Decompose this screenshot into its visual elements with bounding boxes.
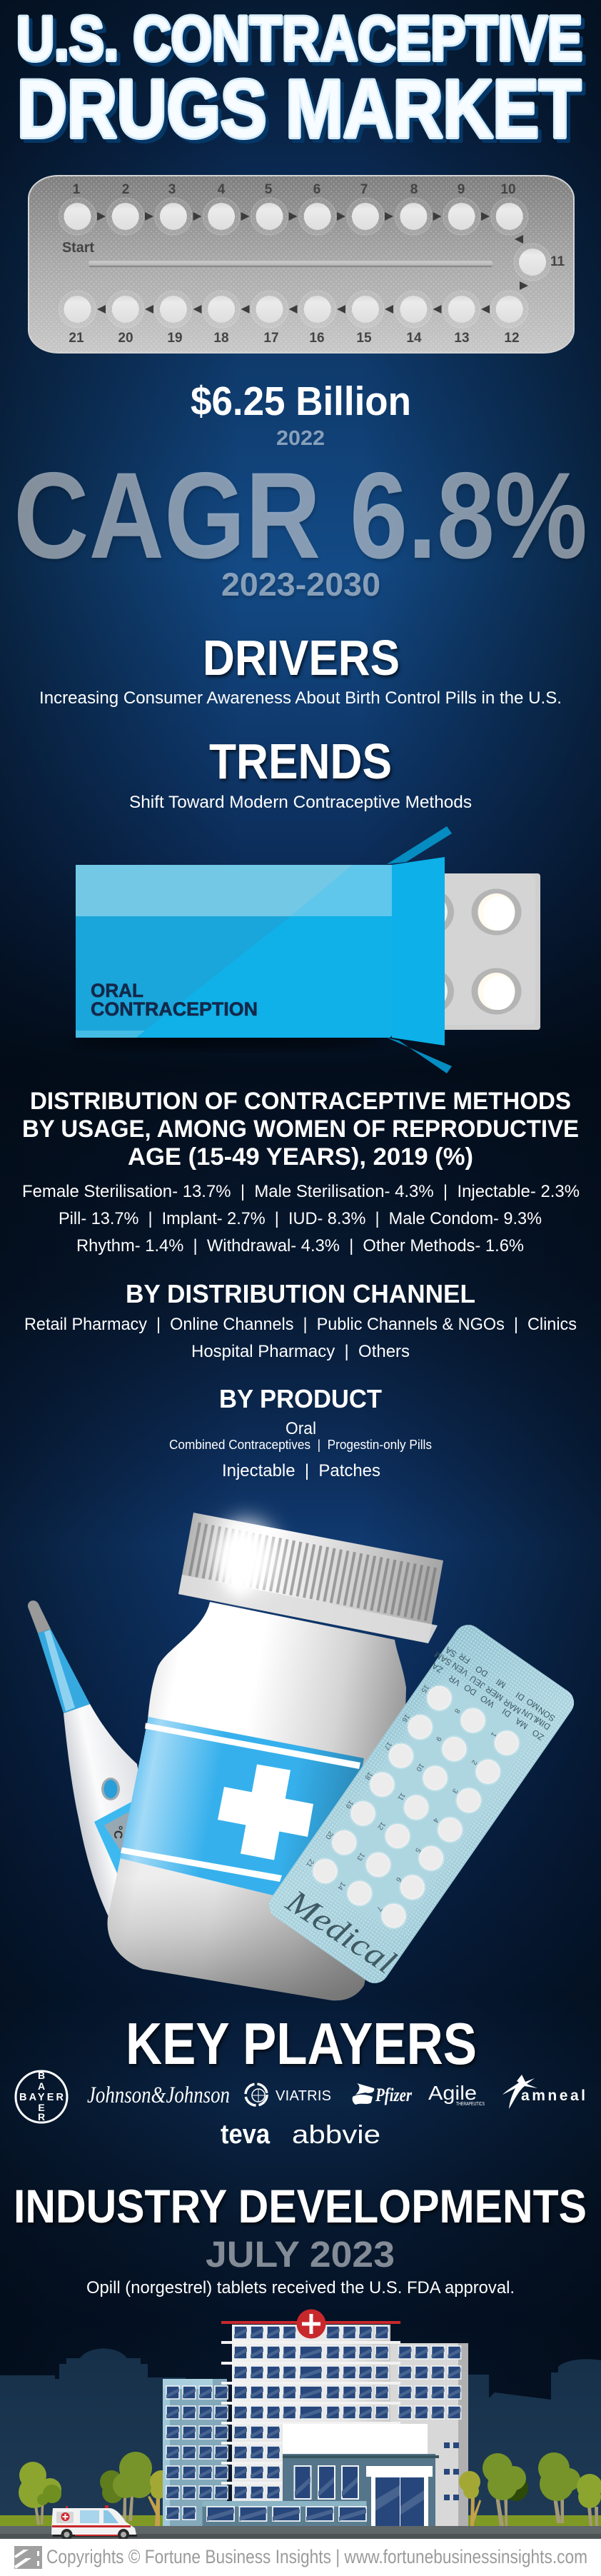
logo: AbbVie: abbvie (292, 2120, 380, 2149)
logo: Johnson & Johnson: Johnson&Johnson (87, 2083, 230, 2108)
box front (76, 865, 392, 1038)
illustration: thermometer (28, 1600, 153, 1921)
blister sheet (403, 873, 540, 1030)
product list (169, 1419, 432, 1480)
day numbers: 9 (458, 182, 465, 197)
logo: Bayer (16, 2070, 67, 2123)
illustration: 21-day pill pack (29, 176, 574, 353)
day numbers: 4 (218, 182, 226, 197)
day numbers: 14 (406, 331, 422, 346)
development date: JULY 2023 (206, 2234, 395, 2275)
blister day numbers: 9 (434, 1735, 443, 1743)
blister pills (313, 1686, 519, 1928)
distribution figures: Rhythm- 1.4% | Withdrawal- 4.3% | Other Methods- 1.6% (76, 1236, 524, 1256)
blister weekday labels: DI (514, 1690, 527, 1703)
blister weekday labels: DI (500, 1706, 513, 1719)
product list: Injectable | Patches (222, 1461, 380, 1480)
left wing windows (166, 2386, 228, 2520)
illustration: hospital (163, 2310, 468, 2526)
drivers heading: DRIVERS (203, 630, 400, 686)
bottom row pills (59, 291, 528, 328)
distribution figures (22, 1182, 580, 1256)
distribution channel list (24, 1315, 577, 1361)
illustration: ambulance (51, 2505, 137, 2540)
day numbers: 6 (313, 182, 320, 197)
distribution heading: BY USAGE, AMONG WOMEN OF REPRODUCTIVE (22, 1116, 579, 1143)
hospital red cross sign (221, 2310, 400, 2338)
blister weekday labels: DO (473, 1663, 490, 1679)
logo: Agile Therapeutics: THERAPEUTICS (456, 2102, 485, 2107)
blister day numbers: 17 (382, 1740, 393, 1752)
label cross (218, 1764, 313, 1860)
day numbers: 3 (168, 182, 176, 197)
distribution heading (22, 1088, 579, 1171)
blister day numbers: 11 (395, 1791, 407, 1802)
distribution heading: AGE (15-49 YEARS), 2019 (%) (128, 1143, 473, 1171)
entrance block (283, 2454, 439, 2526)
logo: Bayer: R (38, 2111, 45, 2123)
product heading: BY PRODUCT (219, 1384, 382, 1413)
pack tear bar (89, 261, 493, 267)
logo: Agile Therapeutics (428, 2082, 485, 2107)
blister day numbers: 19 (343, 1799, 355, 1810)
blister day numbers: 6 (394, 1875, 403, 1883)
blister weekday labels: MO (525, 1696, 542, 1713)
blister weekday labels: MAR (502, 1697, 523, 1716)
blister weekday labels: WO (478, 1693, 496, 1710)
illustration: city skyline (0, 2348, 601, 2528)
start label: Start (62, 240, 94, 256)
logo: Pfizer (353, 2083, 413, 2105)
blister day numbers: 7 (375, 1905, 383, 1913)
day numbers: 8 (410, 182, 418, 197)
thermometer display (94, 1800, 136, 1885)
day numbers: 5 (265, 182, 273, 197)
blister day numbers: 14 (335, 1880, 347, 1892)
market size value: $6.25 Billion (191, 379, 411, 424)
left wing (163, 2379, 227, 2526)
blister weekday labels (430, 1645, 557, 1743)
footer logo (14, 2546, 42, 2569)
logo: Amneal: amneal (521, 2088, 585, 2104)
right wing windows (398, 2346, 461, 2500)
day numbers: 16 (309, 331, 325, 346)
low block with windows (203, 2501, 367, 2526)
blister weekday labels: DO (462, 1682, 478, 1698)
distribution channel heading: BY DISTRIBUTION CHANNEL (126, 1279, 475, 1308)
day numbers: 1 (73, 182, 81, 197)
blister weekday labels: LUN (520, 1707, 540, 1725)
logo: Viatris (246, 2084, 331, 2105)
day numbers: 18 (213, 331, 229, 346)
blister weekday labels: SON (536, 1705, 557, 1723)
blister day numbers: 1 (489, 1730, 498, 1738)
thermometer button (101, 1778, 120, 1800)
blister day numbers: 15 (419, 1683, 430, 1695)
day numbers: 19 (167, 331, 183, 346)
day numbers: 13 (454, 331, 470, 346)
right wing (389, 2343, 468, 2526)
bottle body (108, 1602, 406, 2000)
day numbers: 21 (69, 331, 84, 346)
tower windows (234, 2326, 388, 2499)
blister weekday labels: JEU (468, 1673, 487, 1690)
bottle cap (178, 1513, 443, 1643)
illustration: medicine bottle (108, 1513, 443, 2000)
logo: Amneal (502, 2075, 585, 2109)
day numbers: 17 (263, 331, 279, 346)
day numbers: 10 (500, 182, 516, 197)
title (16, 3, 582, 155)
blister day numbers: 4 (431, 1816, 440, 1824)
development text: Opill (norgestrel) tablets received the U.S. FDA approval. (86, 2278, 515, 2297)
day numbers: 20 (118, 331, 133, 346)
market size year: 2022 (276, 427, 325, 450)
day numbers: 12 (504, 331, 520, 346)
bottle label band (120, 1717, 364, 1910)
illustration: thermometer: °C (111, 1825, 125, 1839)
logo: Teva: teva (221, 2120, 271, 2150)
day numbers: 15 (356, 331, 372, 346)
blister day numbers: 5 (413, 1846, 422, 1854)
illustration: trees right (459, 2452, 601, 2526)
blister day numbers (304, 1683, 498, 1913)
blister weekday labels: ZA (430, 1660, 445, 1675)
blister brand text: Medical (280, 1882, 403, 1980)
main door (366, 2466, 433, 2526)
blister day numbers: 13 (355, 1851, 366, 1863)
floor ledges (221, 2341, 400, 2485)
illustration: trees left (19, 2452, 173, 2526)
blister weekday labels: MI (494, 1677, 507, 1690)
white sign panel (283, 2424, 428, 2454)
logo: Pfizer: Pfizer (375, 2085, 413, 2105)
logo: Bayer: B (38, 2070, 45, 2081)
product list: Oral (286, 1419, 316, 1438)
distribution heading: DISTRIBUTION OF CONTRACEPTIVE METHODS (30, 1088, 571, 1115)
box side flap (392, 857, 445, 1046)
product list: Combined Contraceptives | Progestin-only Pills (169, 1438, 432, 1452)
blister day numbers: 3 (450, 1787, 459, 1795)
blister weekday labels: VEN (450, 1660, 470, 1678)
blister weekday labels: DIM (534, 1715, 552, 1732)
blister day numbers: 8 (453, 1707, 461, 1715)
blister day numbers: 10 (414, 1762, 425, 1773)
turn pill 11 and arrows (514, 235, 551, 290)
logo: Viatris: VIATRIS (276, 2088, 331, 2104)
grass (0, 2515, 601, 2526)
blister weekday labels: FR (457, 1651, 472, 1666)
blister weekday labels: MA (513, 1715, 530, 1731)
day numbers (69, 182, 565, 346)
trends text: Shift Toward Modern Contraceptive Methods (129, 793, 472, 812)
illustration: blister sheet with 21 pills (263, 1619, 580, 1989)
blister weekday labels: SAM (433, 1649, 453, 1668)
logo: Agile Therapeutics: Agile (428, 2082, 477, 2104)
footer band (0, 2539, 601, 2576)
distribution figures: Female Sterilisation- 13.7% | Male Sterilisation- 4.3% | Injectable- 2.3% (22, 1182, 580, 1201)
forecast period: 2023-2030 (221, 566, 380, 603)
blister day numbers: 20 (323, 1830, 335, 1841)
blister weekday labels: ZO (530, 1728, 546, 1743)
day numbers: 2 (122, 182, 129, 197)
logo: Bayer: BAYER (19, 2092, 64, 2103)
drivers text: Increasing Consumer Awareness About Birth Control Pills in the U.S. (39, 688, 562, 708)
key players heading: KEY PLAYERS (126, 2010, 477, 2077)
blister day numbers: 18 (363, 1770, 374, 1782)
distribution channel list: Retail Pharmacy | Online Channels | Public Channels & NGOs | Clinics (24, 1315, 577, 1334)
blister day numbers: 2 (470, 1758, 478, 1766)
day numbers: 7 (360, 182, 368, 197)
box label: ORAL (91, 980, 143, 1001)
trends heading: TRENDS (209, 733, 392, 789)
blister weekday labels: MER (484, 1684, 505, 1703)
distribution figures: Pill- 13.7% | Implant- 2.7% | IUD- 8.3% | Male Condom- 9.3% (59, 1209, 542, 1228)
distribution channel list: Hospital Pharmacy | Others (191, 1342, 410, 1361)
box back flaps (387, 826, 452, 1073)
box label (91, 980, 258, 1020)
central tower (232, 2325, 390, 2423)
box label: CONTRACEPTION (91, 998, 258, 1020)
blister weekday labels: SA (443, 1645, 458, 1660)
logo: Bayer: A (38, 2080, 45, 2092)
illustration: oral contraception box (68, 826, 540, 1073)
day numbers: 11 (550, 254, 565, 269)
blister day numbers: 12 (375, 1820, 387, 1832)
blister day numbers: 21 (304, 1858, 315, 1869)
logo: Bayer: E (38, 2102, 45, 2113)
road (0, 2526, 601, 2539)
blister weekday labels: VR (447, 1673, 463, 1688)
top row pills (59, 198, 528, 235)
blister day numbers: 16 (400, 1713, 411, 1724)
